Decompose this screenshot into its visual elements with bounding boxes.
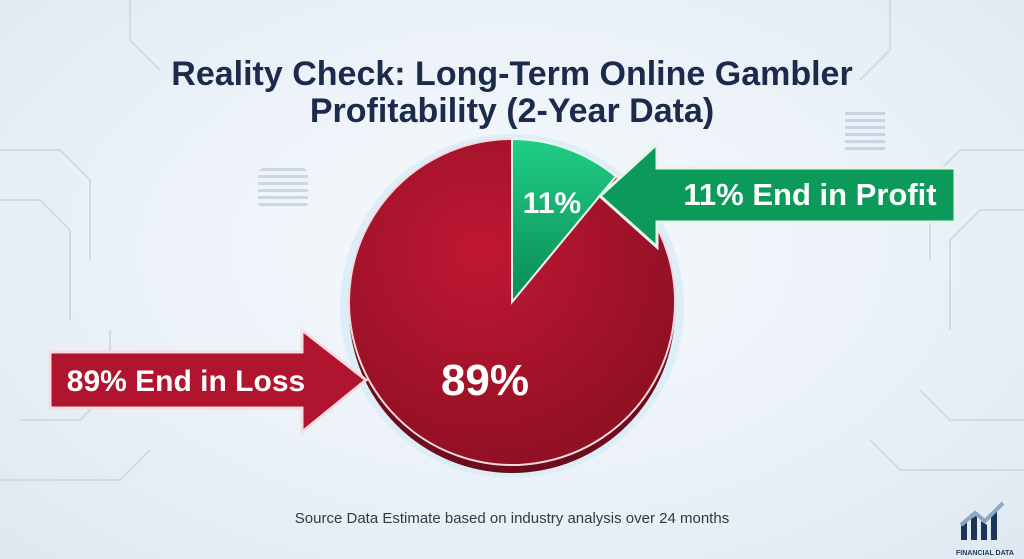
title: Reality Check: Long-Term Online Gambler: [171, 55, 853, 93]
icon: coins right: [845, 112, 885, 152]
arrow: profit: [600, 144, 955, 247]
label 89%: 89%: [441, 356, 529, 405]
title: Profitability (2-Year Data): [310, 92, 714, 130]
title: [171, 55, 853, 130]
logo: FINANCIAL DATA: [956, 550, 1014, 557]
arrow: loss: 89% End in Loss: [67, 365, 305, 398]
label 11%: 11%: [523, 187, 581, 220]
logo: [956, 502, 1014, 557]
arrow: profit: 11% End in Profit: [683, 177, 937, 212]
source note: Source Data Estimate based on industry analysis over 24 months: [295, 510, 729, 527]
icon: coins left: [258, 168, 308, 208]
arrow: loss: [50, 330, 366, 432]
green slice: [512, 139, 616, 302]
